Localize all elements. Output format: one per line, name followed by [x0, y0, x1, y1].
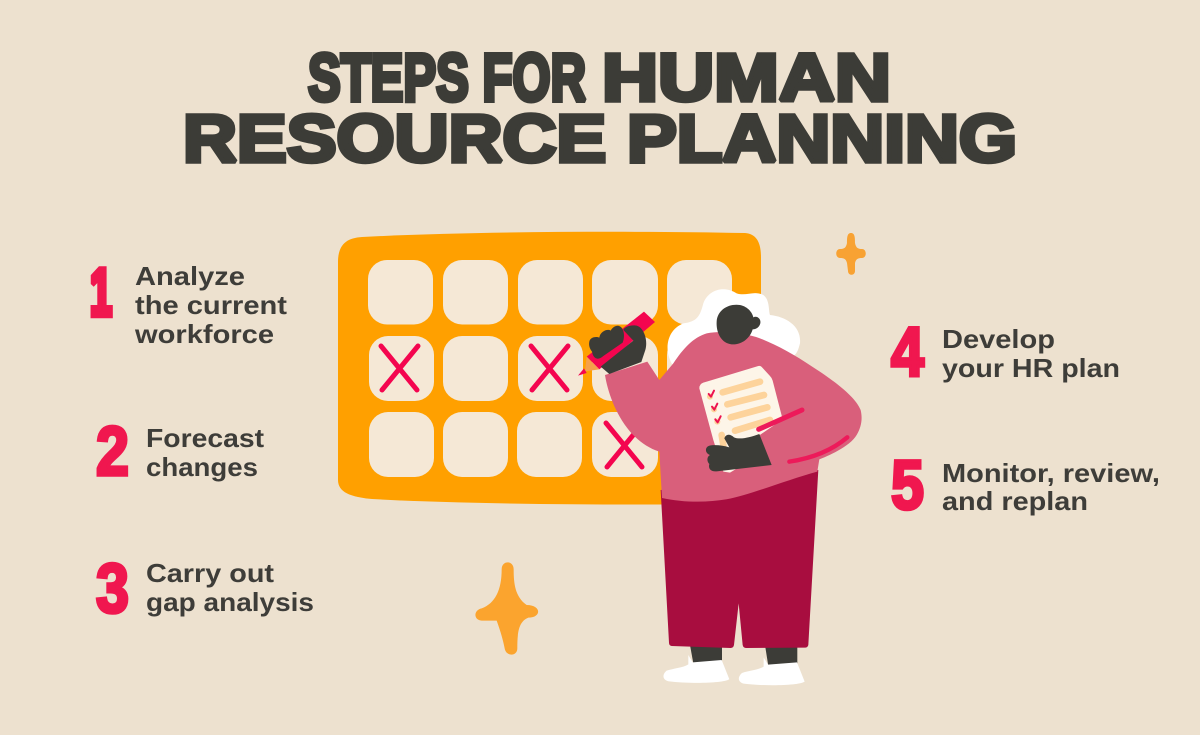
calendar board: [338, 232, 761, 504]
step 3: gap analysis: [146, 587, 314, 617]
calendar: [338, 232, 761, 504]
calendar cells: [368, 260, 732, 477]
step 3: Carry out: [146, 558, 274, 588]
step 1: workforce: [134, 319, 274, 349]
icon: small sparkle: [836, 233, 866, 275]
pen on sleeve: [759, 410, 802, 429]
upper hand fingers: [589, 326, 624, 359]
step 4: Develop: [942, 324, 1055, 354]
upper hand palm: [601, 325, 646, 374]
step 4: [891, 313, 1120, 391]
lower hand: [706, 434, 772, 471]
head: [717, 305, 760, 344]
step 2: Forecast: [146, 423, 264, 453]
sleeve fold mark: [789, 437, 847, 462]
step 1: 1: [90, 255, 112, 329]
title: HUMAN: [602, 41, 891, 116]
step 1: Analyze: [135, 261, 245, 291]
marker pencil: [578, 312, 655, 376]
title: RESOURCE PLANNING: [183, 102, 1017, 177]
step 4: 4: [891, 313, 924, 391]
step 2: changes: [146, 452, 258, 482]
legs: [690, 645, 797, 666]
step 3: [96, 549, 314, 627]
icon: large sparkle: [475, 562, 538, 655]
title: STEPS FOR: [308, 41, 586, 116]
step 5: 5: [891, 446, 924, 524]
title: [183, 41, 1017, 177]
hair: [668, 289, 800, 365]
shoes: [663, 655, 805, 685]
step 5: [891, 446, 1160, 524]
step 1: the current: [135, 290, 287, 320]
step 3: 3: [96, 549, 129, 627]
sweater: [605, 332, 862, 502]
checklist ticks: [707, 391, 721, 425]
step 5: Monitor, review,: [942, 458, 1160, 488]
step 2: [96, 412, 264, 490]
step 1: [90, 255, 287, 349]
checklist paper: [699, 366, 783, 473]
trousers: [661, 470, 818, 648]
checklist lines: [722, 382, 770, 445]
step 5: and replan: [942, 486, 1088, 516]
person illustration: [578, 289, 862, 685]
step 4: your HR plan: [942, 353, 1120, 383]
calendar crosses: [381, 346, 643, 467]
step 2: 2: [96, 412, 129, 490]
